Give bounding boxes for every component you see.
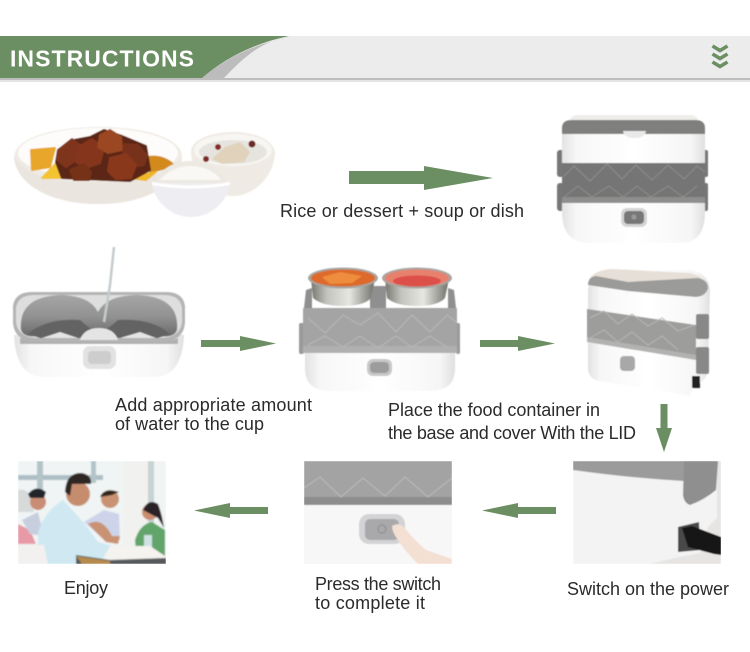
icon: triple chevron	[712, 46, 728, 66]
arrow: covered box to power	[656, 404, 672, 452]
soup bowl	[191, 132, 275, 196]
photo: food dishes	[14, 127, 275, 217]
heading: instructions: INSTRUCTIONS	[10, 46, 194, 72]
plate with braised pork and pineapple	[14, 127, 182, 204]
arrow: switch to enjoy	[194, 503, 268, 518]
photo: closed lunch box front	[557, 115, 708, 243]
photo: closed lunch box angled view	[587, 269, 710, 396]
arrow: water base to containers	[201, 336, 276, 351]
finger	[392, 524, 452, 564]
caption: add water: Add appropriate amount	[115, 395, 312, 415]
caption: press the switch	[315, 574, 441, 613]
caption: press the switch: to complete it	[315, 593, 425, 613]
caption: place food container: the base and cover With the LID	[388, 423, 636, 443]
food container left	[308, 268, 378, 306]
rice bowl	[152, 161, 230, 217]
food container right	[382, 268, 452, 306]
caption: press the switch: Press the switch	[315, 574, 441, 594]
photo: people enjoying a meal	[18, 461, 166, 564]
caption: add water	[115, 395, 312, 434]
caption: add water: of water to the cup	[115, 414, 264, 434]
label: enjoy: Enjoy	[64, 578, 108, 598]
caption: place food container	[388, 400, 636, 443]
water stream	[104, 247, 114, 322]
photo: plugging in the power cord	[573, 461, 721, 564]
photo: pressing the switch	[304, 461, 452, 564]
caption: place food container: Place the food container in	[388, 400, 600, 420]
caption: switch on the power: Switch on the power	[567, 579, 729, 599]
arrow: food to lunch box	[349, 166, 493, 190]
header banner	[0, 36, 750, 82]
photo: pouring water into base	[13, 247, 185, 377]
photo: base with food containers	[299, 268, 460, 391]
arrow: containers to covered box	[480, 336, 555, 351]
caption: rice or dessert: Rice or dessert + soup or dish	[280, 201, 524, 221]
arrow: power to switch	[482, 503, 556, 518]
